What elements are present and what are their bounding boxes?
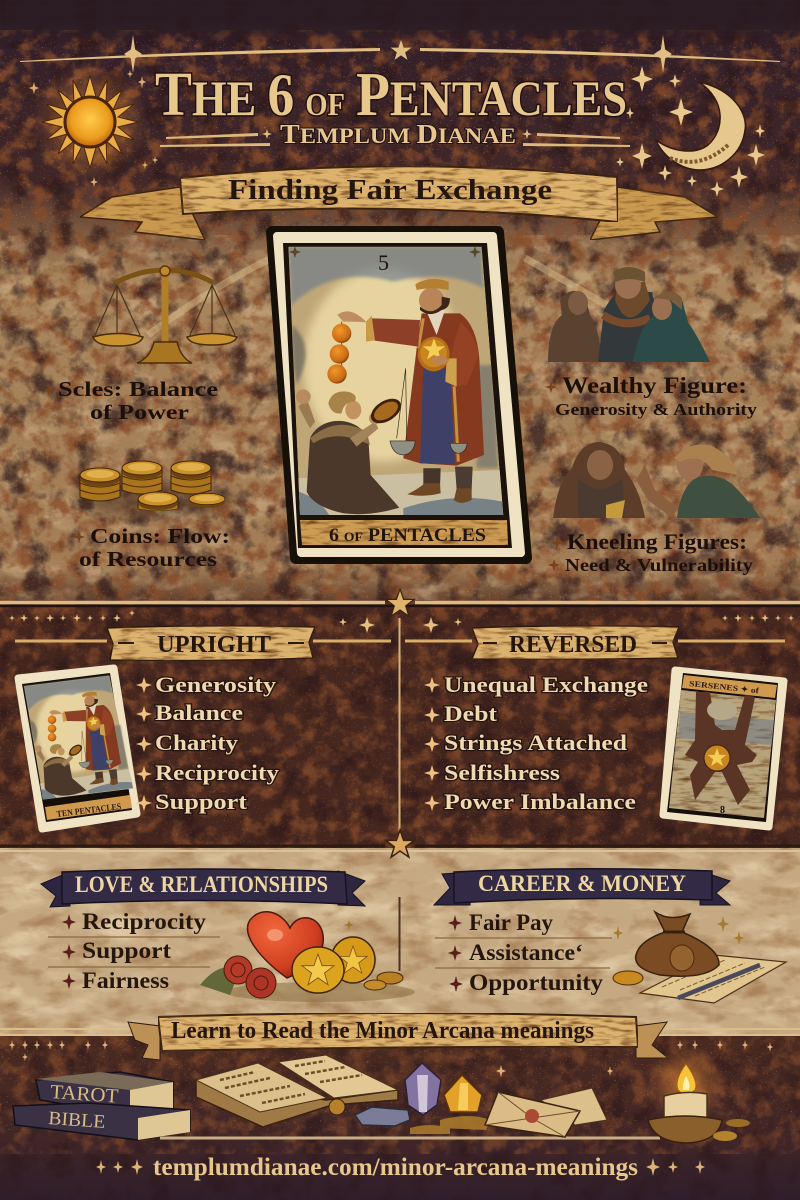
ribbon: love and relationships: [41, 869, 365, 907]
list: upright: Reciprocity: [155, 760, 279, 785]
header ornament rule: [20, 35, 780, 73]
list: reversed: Power Imbalance: [444, 789, 636, 814]
list: reversed: Unequal Exchange: [444, 672, 648, 697]
center divider: [398, 897, 400, 971]
list: career: [435, 910, 612, 995]
small card plate: [45, 795, 132, 820]
list: upright: Balance: [155, 700, 243, 725]
small card: upright: [18, 668, 137, 829]
icon: coin stacks: [75, 461, 235, 516]
main tarot card: [272, 232, 526, 558]
icon: books Tarot and Bible: BIBLE: [48, 1108, 106, 1133]
list: upright: Support: [155, 789, 248, 814]
ribbon text: Learn to Read the Minor Arcana meanings: [171, 1018, 594, 1044]
list: reversed: Selfishress: [444, 760, 561, 785]
background: footer dark field: [0, 1034, 800, 1200]
label: coins: Coins: Flow:: [90, 524, 230, 548]
label: kneeling figures: Need & Vulnerability: [565, 555, 753, 575]
list: career: Fair Pay: [469, 910, 553, 935]
card name plate: [300, 520, 508, 545]
footer url: templumdianae.com/minor-arcana-meanings: [153, 1154, 638, 1181]
ribbon: learn to read: [128, 1013, 668, 1060]
list: reversed: Debt: [444, 701, 498, 726]
decorative stars: footer: [9, 1040, 773, 1077]
subtitle ornament lines: [160, 129, 630, 147]
list: career: Assistance‘: [469, 940, 583, 965]
icon: candle in bowl: [646, 1045, 750, 1143]
ribbon: Finding Fair Exchange: [80, 166, 718, 240]
label: scales: Scles: Balance: [58, 377, 218, 401]
reversed heading: REVERSED: [509, 632, 637, 658]
list: upright: Generosity: [155, 672, 276, 697]
career heading: CAREER & MONEY: [478, 871, 686, 896]
label: wealthy figure: [545, 373, 758, 419]
list: upright: Charity: [155, 730, 238, 755]
subtitle: TEMPLUM DIANAE: [280, 119, 516, 149]
icon: coin scatter on shelf: [410, 1116, 490, 1134]
reversed figure: [685, 692, 757, 805]
love heading: LOVE & RELATIONSHIPS: [75, 872, 328, 897]
background: middle panel field: [0, 604, 800, 848]
small stars near sun: [29, 70, 158, 187]
icon: sun: [32, 64, 148, 180]
label: scales: [43, 377, 218, 424]
label: scales: of Power: [90, 400, 189, 424]
reversed card numeral: 8: [720, 805, 725, 816]
divider rules and star: parchment top: [0, 830, 800, 857]
label: wealthy figure: Generosity & Authority: [555, 400, 758, 419]
icon: two kneeling figures: [553, 442, 760, 518]
list: love: Reciprocity: [82, 909, 207, 934]
reversed card caption: SERSENES ✦ of: [689, 679, 760, 695]
background: parchment field: [0, 848, 800, 1034]
list: love: [48, 909, 220, 993]
small card: reversed: [663, 670, 784, 827]
icon: scales: [93, 266, 237, 363]
list: love: Fairness: [82, 968, 169, 993]
ribbon text: Finding Fair Exchange: [228, 175, 552, 206]
card name: 6 OF PENTACLES: [329, 525, 486, 546]
upright heading: UPRIGHT: [157, 632, 271, 658]
card illustration: [288, 247, 505, 517]
icon: three figures: [548, 267, 710, 362]
icon: letter and envelope: [485, 1088, 607, 1137]
icon: heart roses and coins: [200, 912, 415, 1002]
icon: open book: [196, 1055, 398, 1127]
card corner marks: [289, 246, 481, 258]
ribbon: upright: [15, 626, 391, 661]
list: upright: [136, 672, 279, 814]
icon: crescent moon and stars: [616, 66, 765, 197]
book labels: TAROT: [50, 1081, 119, 1108]
label: kneeling figures: Kneeling Figures:: [567, 529, 747, 554]
divider rules and stars: upper panel: [0, 589, 800, 834]
shelf line: [160, 1136, 660, 1140]
footer top rules: [0, 1029, 800, 1035]
icon: crystals and stone: [355, 1063, 482, 1126]
card numeral: 5: [378, 250, 389, 275]
list: reversed: Strings Attached: [444, 730, 627, 755]
ribbon: career and money: [434, 869, 730, 905]
label: kneeling figures: [548, 529, 753, 575]
label: coins: of Resources: [79, 547, 217, 571]
reversed dashes: [483, 642, 667, 644]
label: wealthy figure: Wealthy Figure:: [562, 373, 747, 398]
title: THE 6 OF PENTACLES: [155, 61, 627, 129]
ribbon: reversed: [405, 626, 785, 659]
list: reversed: [424, 672, 648, 814]
background: upper dark mottled field: [0, 0, 800, 604]
label: coins: [73, 524, 230, 571]
list: career: Opportunity: [469, 970, 604, 995]
icon: books Tarot and Bible: [13, 1072, 190, 1140]
icon: money bag, letter and pen: [613, 912, 786, 1003]
small card caption: TEN PENTACLES: [56, 801, 122, 819]
list: love: Support: [82, 938, 171, 963]
upright dashes: [118, 642, 304, 644]
